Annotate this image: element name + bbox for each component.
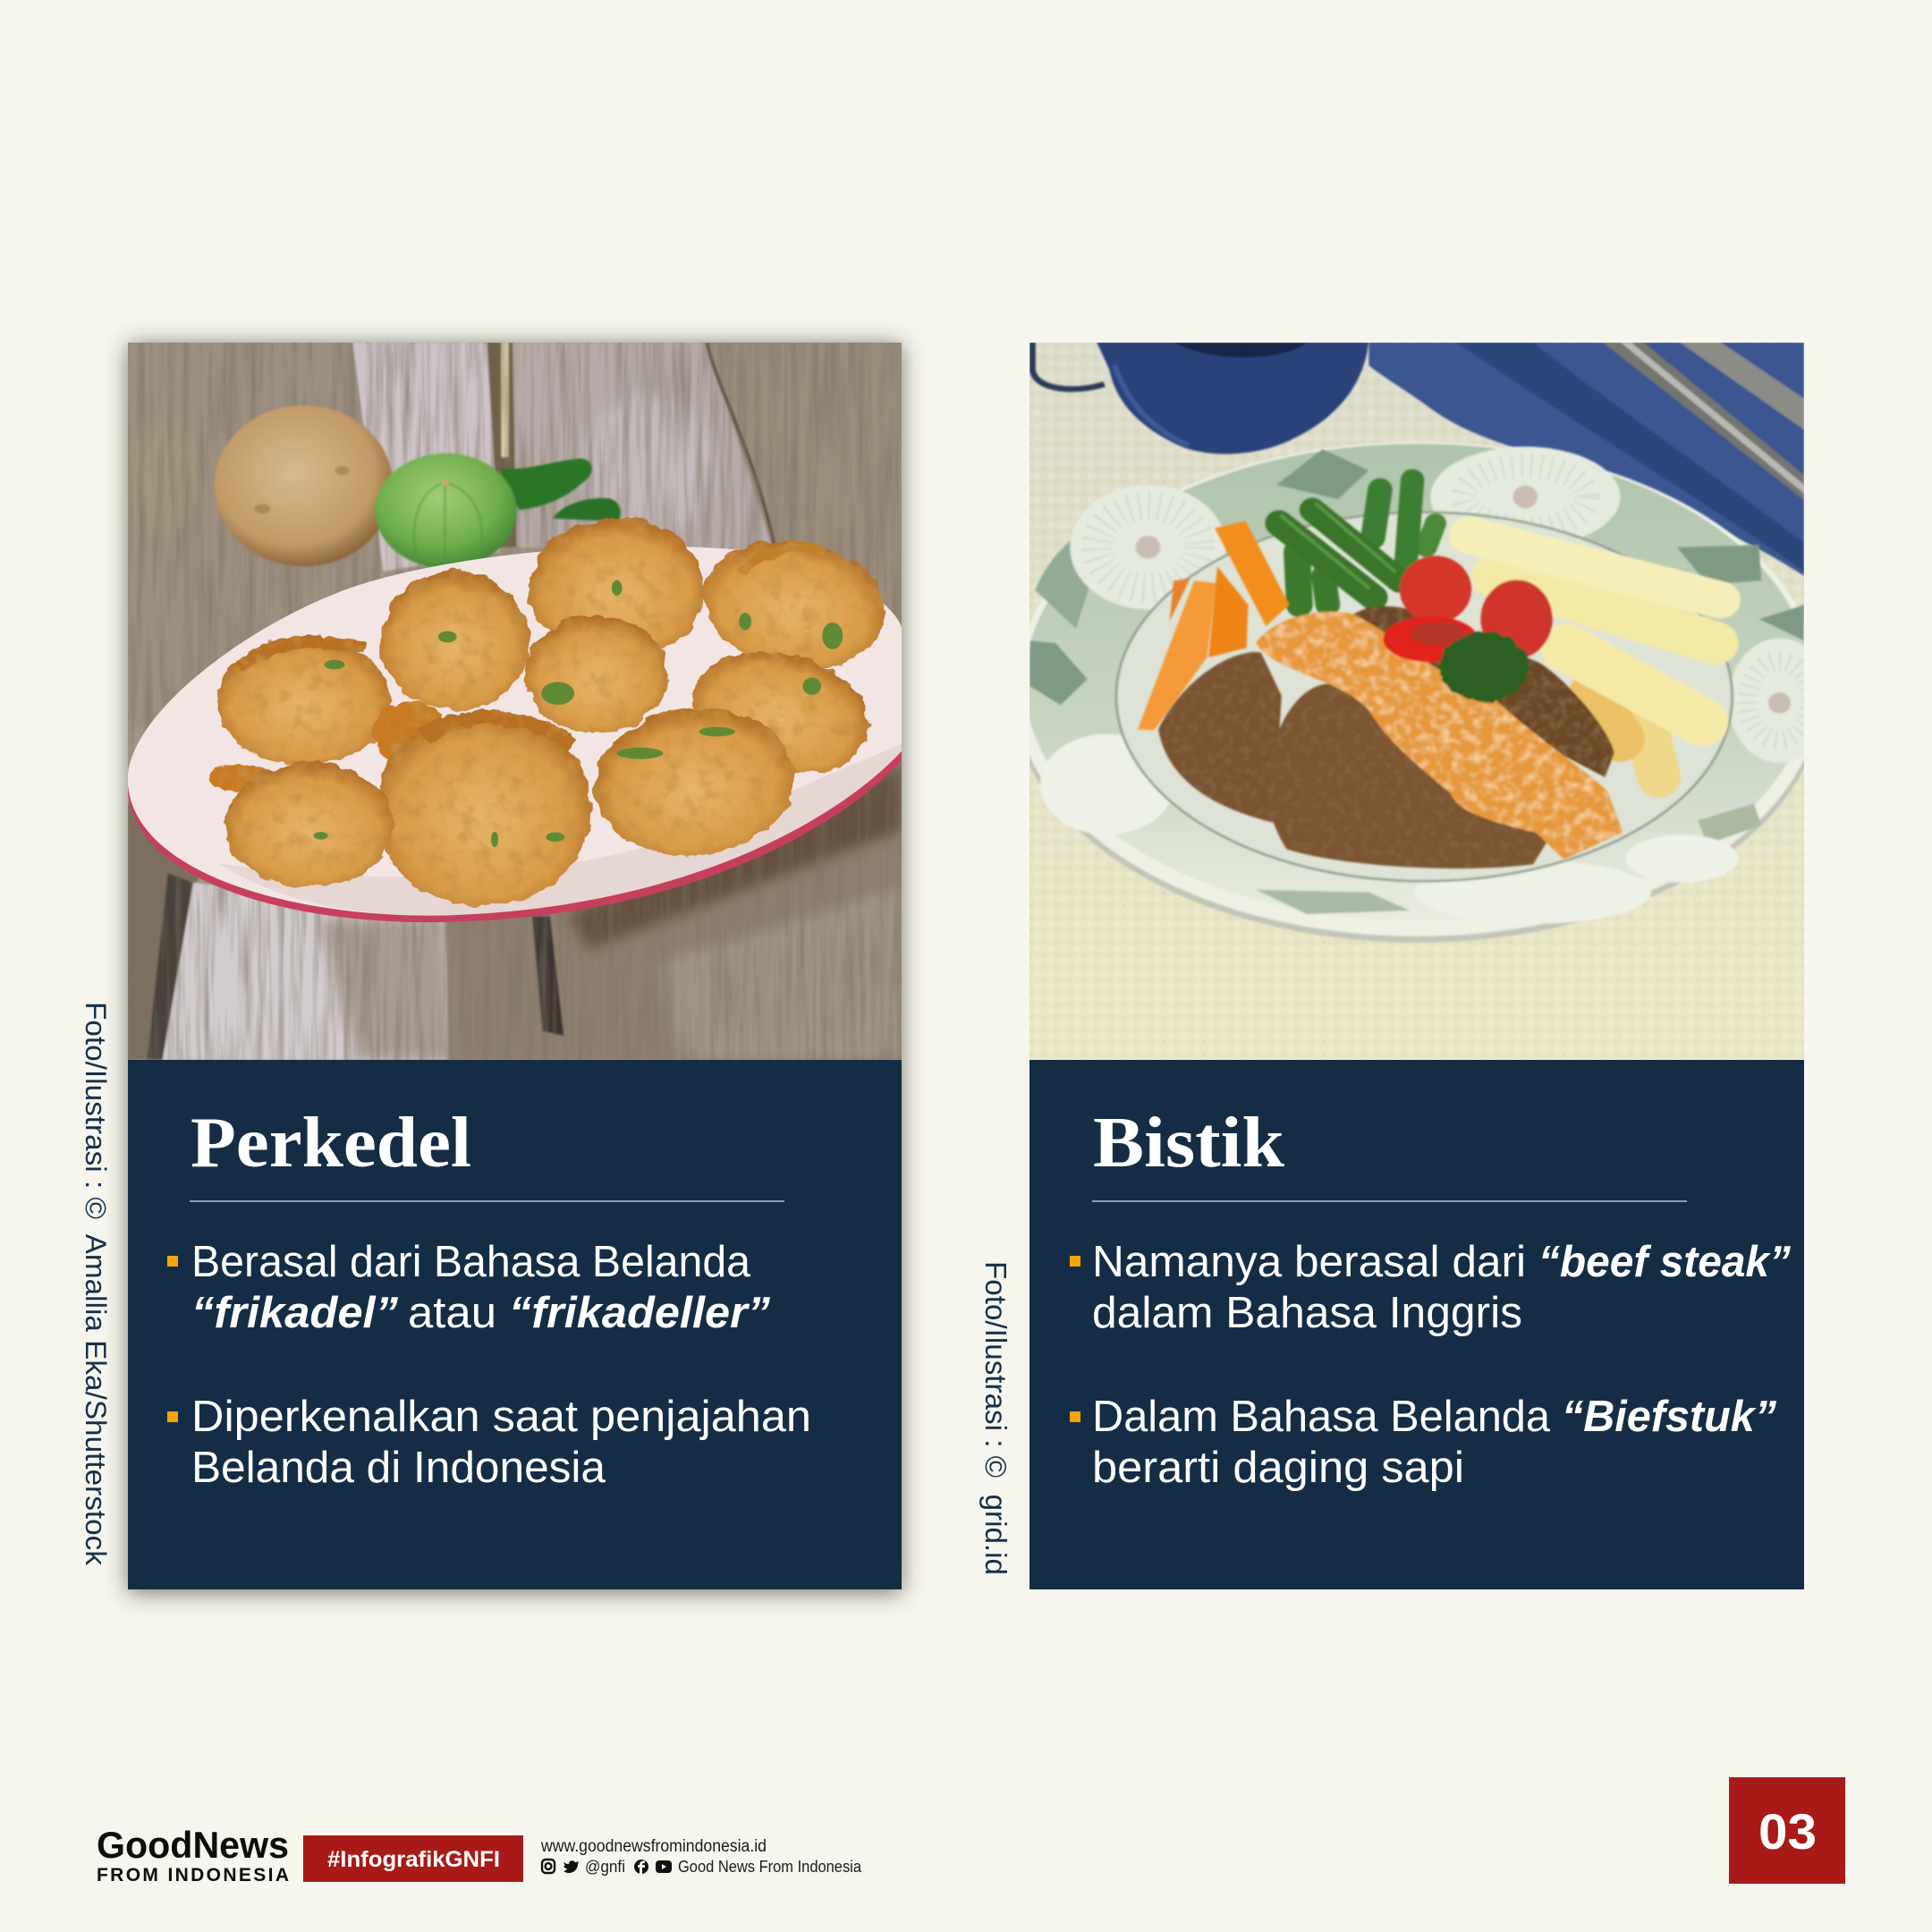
footer logo: GoodNews From Indonesia bbox=[97, 1824, 289, 1885]
hashtag badge bbox=[303, 1835, 523, 1882]
icon: youtube bbox=[656, 1860, 672, 1873]
icon: green tomato bbox=[375, 453, 517, 568]
bullet 1: Bistik bbox=[1070, 1238, 1791, 1337]
bullet 2: Perkedel bbox=[167, 1393, 811, 1492]
photo credit: Perkedel: Foto/Ilustrasi : © Amallia Eka/Shutterstock bbox=[80, 1002, 112, 1566]
bullet 1: Perkedel bbox=[167, 1238, 771, 1337]
page number badge: 03 bbox=[1758, 1803, 1817, 1860]
blue cup bbox=[1032, 342, 1368, 454]
bullet 1: Perkedel: “frikadel” bbox=[191, 1289, 399, 1337]
website url: www.goodnewsfromindonesia.id bbox=[540, 1837, 767, 1856]
panel: Perkedel card bbox=[116, 322, 921, 1593]
navy text panel bbox=[1030, 1060, 1804, 1589]
photo: perkedel on a white plate bbox=[116, 322, 921, 1073]
panel: Bistik card bbox=[1012, 322, 1831, 1589]
bullet 1: Bistik: “beef steak” bbox=[1538, 1238, 1791, 1286]
icon: green chilies bbox=[501, 459, 621, 521]
icon: facebook bbox=[634, 1860, 648, 1874]
photo credit: Bistik: Foto/Ilustrasi : © grid.id bbox=[979, 1261, 1013, 1575]
navy text panel bbox=[128, 1060, 902, 1589]
icon: instagram bbox=[542, 1860, 555, 1873]
heading: Perkedel: Perkedel bbox=[191, 1104, 471, 1182]
vegetables and steak bbox=[1138, 480, 1721, 869]
footer logo: GoodNews From Indonesia: GoodNews bbox=[97, 1824, 289, 1866]
icon: twitter bbox=[564, 1860, 579, 1873]
bullet 1: Bistik: Namanya berasal dari bbox=[1092, 1238, 1526, 1286]
bullet 2: Bistik bbox=[1070, 1393, 1776, 1492]
hashtag badge: #InfografikGNFI bbox=[327, 1847, 500, 1872]
bullet 2: Perkedel: Diperkenalkan saat penjajahan bbox=[191, 1393, 811, 1441]
herb specks bbox=[313, 580, 843, 847]
photo: bistik plate bbox=[1012, 322, 1831, 1073]
bullet 1: Perkedel: Berasal dari Bahasa Belanda bbox=[191, 1238, 751, 1286]
footer logo: GoodNews From Indonesia: FROM INDONESIA bbox=[97, 1865, 289, 1885]
blue napkin and cutlery bbox=[1368, 342, 1804, 576]
bullet 1: Perkedel: atau bbox=[408, 1289, 496, 1337]
bullet 2: Bistik: Dalam Bahasa Belanda bbox=[1092, 1393, 1551, 1441]
perkedel fritters bbox=[208, 519, 897, 907]
patterned plate bbox=[1012, 442, 1831, 943]
page number badge bbox=[1729, 1777, 1845, 1884]
social handles bbox=[542, 1858, 862, 1876]
bullet 1: Bistik: dalam Bahasa Inggris bbox=[1092, 1289, 1522, 1337]
bullet 2: Perkedel: Belanda di Indonesia bbox=[191, 1444, 606, 1492]
heading: Bistik: Bistik bbox=[1093, 1104, 1285, 1182]
bullet 2: Bistik: berarti daging sapi bbox=[1092, 1444, 1464, 1492]
icon: potato bbox=[215, 405, 393, 566]
bullet 1: Perkedel: “frikadeller” bbox=[509, 1289, 771, 1337]
social handles: @gnfi bbox=[585, 1858, 625, 1876]
plate bbox=[128, 547, 902, 922]
social handles: Good News From Indonesia bbox=[678, 1858, 862, 1876]
bullet 2: Bistik: “Biefstuk” bbox=[1562, 1393, 1776, 1441]
